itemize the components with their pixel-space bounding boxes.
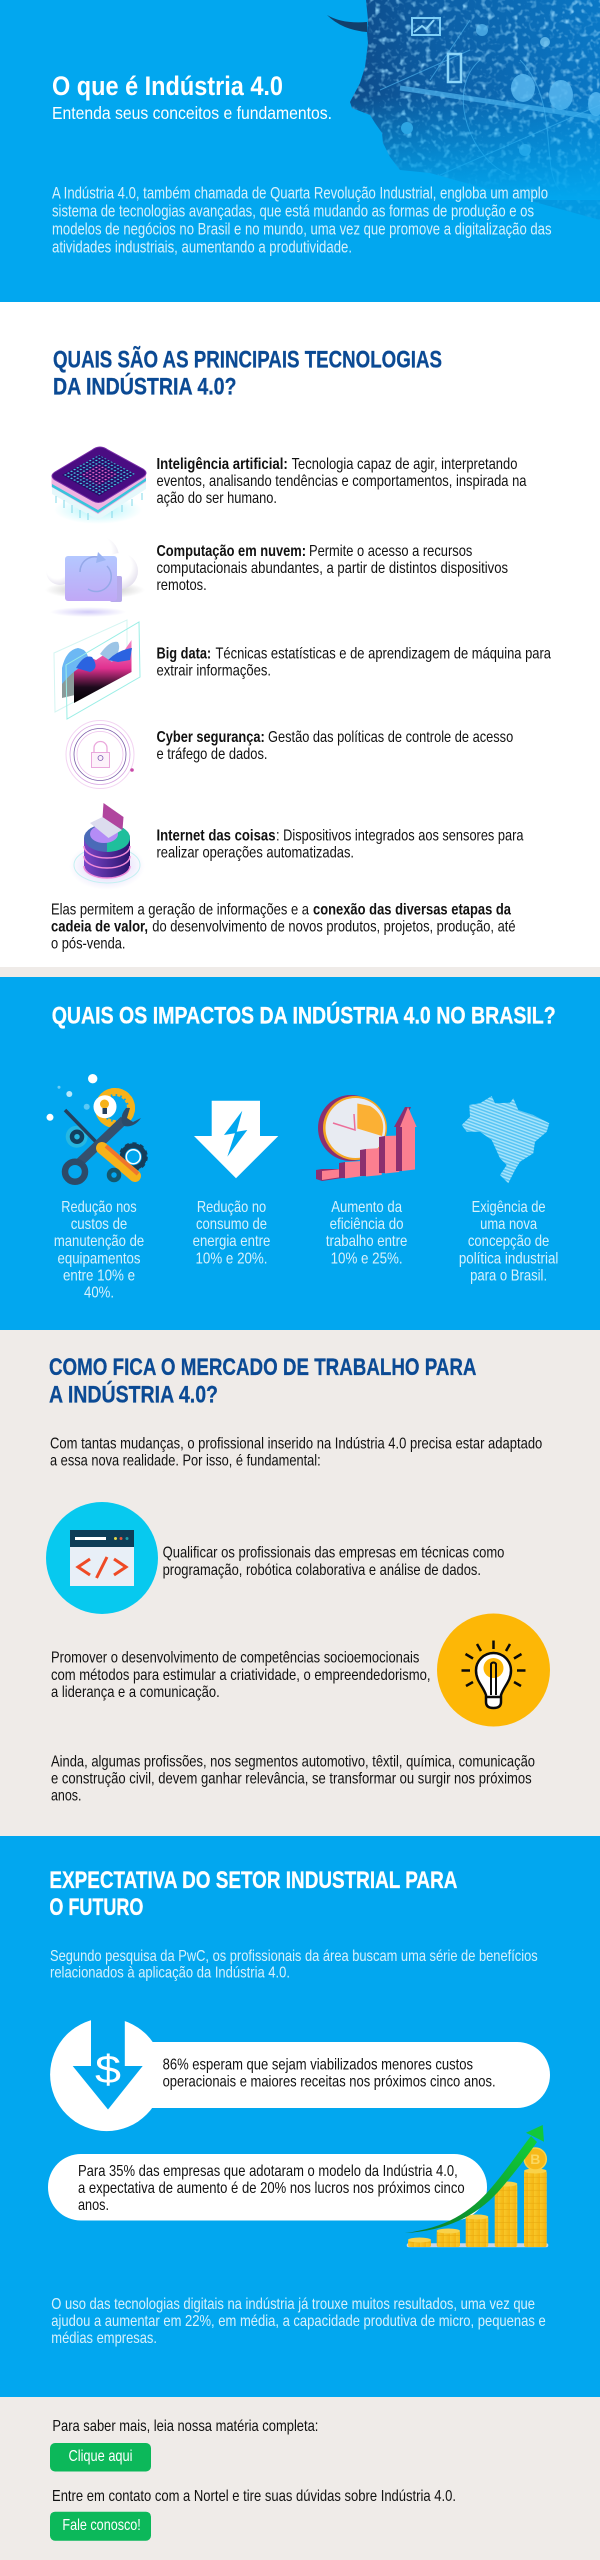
caption: maintenance: equipamentos [58,1250,140,1268]
text block: Inteligência artificial: Inteligência artificial: [156,456,288,473]
text block: Computação em nuvem [156,543,508,594]
icon: AI chip [52,447,146,524]
icon: clock and rising bars [316,1095,417,1181]
caption: maintenance: Redução nos [61,1199,137,1216]
caption: maintenance: entre 10% e [63,1268,135,1284]
text block: soft skills [51,1650,430,1701]
icon: light bulb [437,1614,550,1726]
text block: value chain: do desenvolvimento de novos produtos, projetos, produção, até [152,918,516,936]
button: Fale conosco [50,2512,151,2541]
text block: Internet das coisas [156,828,524,862]
text block: Internet das coisas: Internet das coisas [156,828,276,844]
icon: dollar down arrow: $ [95,2048,121,2092]
text block: Internet das coisas: : Dispositivos integrados aos sensores para [276,828,524,844]
text block: adaptation: a essa nova realidade. Por isso, é fundamental: [50,1452,321,1470]
icon: energy down arrow [194,1101,278,1178]
icon: dollar down arrow [73,2016,143,2110]
heading: technologies [53,346,442,400]
subtitle: Entenda seus conceitos e fundamentos. [52,103,332,123]
icon: cyber security lock [66,720,134,788]
caption: efficiency [326,1199,407,1268]
panel: technologies [0,302,600,967]
text: read more: Para saber mais, leia nossa matéria completa: [52,2418,318,2435]
caption: industrial policy [459,1199,558,1284]
heading: expectations [49,1867,457,1921]
text block: qualify [163,1545,504,1579]
panel: job market [0,1330,600,1836]
button: Fale conosco: Fale conosco! [62,2517,141,2534]
heading: job market: A INDÚSTRIA 4.0? [49,1380,218,1408]
caption: maintenance [54,1199,144,1302]
text block: value chain [51,902,516,952]
caption: industrial policy: Exigência de [472,1199,546,1216]
text block: professions: anos. [51,1788,82,1805]
text block: PwC survey: relacionados à aplicação da Indústria 4.0. [50,1965,290,1982]
text block: professions [51,1754,535,1805]
caption: efficiency: 10% e 25%. [331,1250,403,1268]
icon: map of Brazil [462,1096,549,1183]
caption: efficiency: Aumento da [331,1199,402,1216]
text block: Internet das coisas: realizar operações automatizadas. [156,844,354,862]
text block: Inteligência artificial: eventos, analisando tendências e comportamentos, inspirada na [156,473,527,490]
heading: technologies: DA INDÚSTRIA 4.0? [53,372,236,400]
callout: profit increase [48,2154,487,2220]
text block: Big data: Big data: [156,646,211,662]
text block: Computação em nuvem: computacionais abundantes, a partir de distintos dispositivos [156,560,508,577]
caption: energy: energia entre [193,1233,270,1250]
heading: technologies: QUAIS SÃO AS PRINCIPAIS TECNOLOGIAS [53,346,442,374]
icon: internet of things database [69,803,145,890]
text block: Computação em nuvem: remotos. [156,577,207,594]
caption: energy [193,1199,270,1268]
text block: productive capacity: médias empresas. [51,2330,157,2347]
text block: Computação em nuvem: Computação em nuvem: [156,543,306,560]
text block: value chain: conexão das diversas etapas da [313,902,511,918]
button: Clique aqui [50,2443,151,2472]
text block: adaptation [50,1435,542,1470]
text block: soft skills: com métodos para estimular a criatividade, o empreendedorismo, [51,1667,430,1684]
text block: Inteligência artificial: ação do ser humano. [156,490,277,507]
caption: industrial policy: política industrial [459,1250,558,1268]
caption: maintenance: custos de [71,1216,127,1233]
title: O que é Indústria 4.0 [52,71,283,101]
text block: productive capacity [51,2296,546,2347]
callout text: operacionais e maiores receitas nos próximos cinco anos. [163,2074,496,2091]
caption: industrial policy: para o Brasil. [470,1268,547,1284]
icon: coin stacks and growth arrow [405,2125,548,2247]
panel: impacts [0,977,600,1330]
caption: energy: Redução no [197,1199,266,1216]
heading: job market [49,1354,477,1408]
callout: profit increase: anos. [78,2197,109,2214]
text block: intro [52,184,552,256]
text block: Cyber segurança: e tráfego de dados. [156,746,268,763]
caption: efficiency: eficiência do [330,1216,404,1233]
caption: maintenance: manutenção de [54,1233,144,1250]
text block: PwC survey [50,1948,538,1982]
text block: qualify: programação, robótica colaborativa e análise de dados. [163,1562,481,1579]
heading: expectations: O FUTURO [49,1894,143,1921]
text block: soft skills: Promover o desenvolvimento de competências socioemocionais [51,1650,419,1667]
text block: Cyber segurança: Cyber segurança: [156,729,265,746]
callout: profit increase: a expectativa de aumento é de 20% nos lucros nos próximos cinco [78,2180,465,2197]
caption: maintenance: 40%. [84,1284,114,1302]
text block: intro: atividades industriais, aumentando a produtividade. [52,238,352,256]
callout text: 86% esperam que sejam viabilizados menores custos [163,2057,473,2074]
panel: hero [0,0,600,302]
text block: Big data [156,646,551,680]
callout: lower costs [50,2016,550,2131]
heading: job market: COMO FICA O MERCADO DE TRABALHO PARA [49,1354,477,1381]
text block: Computação em nuvem: Permite o acesso a recursos [309,543,472,560]
text block: Cyber segurança: Gestão das políticas de controle de acesso [268,729,513,746]
caption: industrial policy: concepção de [468,1233,549,1250]
callout: profit increase: Para 35% das empresas que adotaram o modelo da Indústria 4.0, [78,2163,458,2180]
text block: soft skills: a liderança e a comunicação. [51,1684,220,1701]
text block: Inteligência artificial [156,456,527,507]
caption: energy: consumo de [196,1216,267,1233]
image: worker profile with digital overlay [327,0,600,240]
icon: big data chart [54,620,140,719]
caption: industrial policy: uma nova [480,1216,537,1233]
icon: coin stacks and growth arrow: B [530,2151,540,2167]
panel: footer [0,2397,600,2560]
text block: Cyber segurança [156,729,513,763]
caption: energy: 10% e 20%. [196,1250,268,1268]
text block: qualify: Qualificar os profissionais das empresas em técnicas como [163,1545,504,1562]
text block: Big data: extrair informações. [156,662,271,680]
callout text [163,2057,496,2091]
panel: expectations [0,1836,600,2397]
text block: value chain: Elas permitem a geração de informações e a [51,902,309,918]
heading: expectations: EXPECTATIVA DO SETOR INDUSTRIAL PARA [49,1867,457,1894]
text block: value chain: cadeia de valor, [51,918,148,936]
icon: tools and gears [46,1074,146,1182]
caption: efficiency: trabalho entre [326,1233,407,1250]
button: Clique aqui: Clique aqui [68,2448,132,2465]
icon: code window [46,1502,158,1614]
icon: cloud computing [45,536,145,617]
text block: value chain: o pós-venda. [51,936,126,952]
text block: Inteligência artificial: Tecnologia capaz de agir, interpretando [292,456,517,473]
text: contact: Entre em contato com a Nortel e tire suas dúvidas sobre Indústria 4.0. [52,2488,456,2505]
